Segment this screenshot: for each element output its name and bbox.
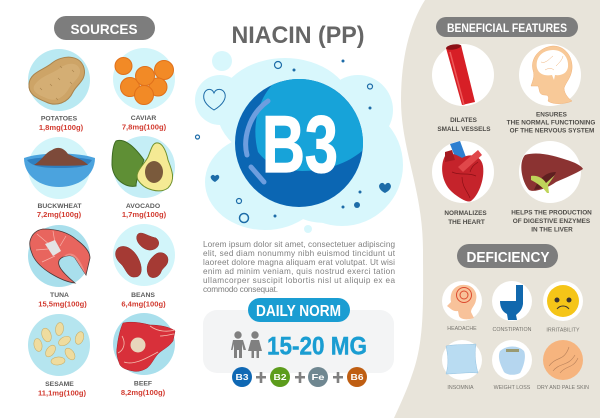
- feature: dilates small vessels: [432, 43, 494, 133]
- feature: heart: [432, 141, 494, 226]
- daily norm pill: DAILY NORM: [256, 303, 341, 320]
- feature: liver: OF DIGESTIVE ENZYMES: [513, 218, 591, 225]
- source: avocado: 1,7mg(100g): [122, 210, 167, 219]
- source: beans: 6,4mg(100g): [121, 300, 166, 308]
- daily norm panel: [203, 298, 394, 387]
- source: beef: BEEF: [134, 380, 152, 388]
- source: tuna: TUNA: [50, 292, 69, 299]
- feature: dilates small vessels: DILATES: [450, 117, 478, 124]
- feature: nervous system: OF THE NERVOUS SYSTEM: [510, 128, 594, 134]
- feature: dilates small vessels: SMALL VESSELS: [437, 126, 491, 133]
- title: NIACIN (PP): [232, 22, 364, 49]
- symptom: insomnia: INSOMNIA: [447, 385, 474, 391]
- feature: liver: HELPS THE PRODUCTION: [511, 210, 592, 216]
- source: beans: BEANS: [131, 292, 155, 299]
- source: tuna: [28, 225, 90, 308]
- feature: nervous system: [507, 44, 595, 134]
- source: avocado: AVOCADO: [126, 203, 160, 210]
- source: tuna: 15,5mg(100g): [38, 300, 87, 308]
- source: sesame: [28, 314, 90, 398]
- sources heading: [54, 16, 155, 40]
- symptom: insomnia: [442, 340, 482, 391]
- deficiency heading: [457, 244, 558, 268]
- source: buckwheat: [24, 137, 95, 219]
- feature: heart: THE HEART: [448, 219, 485, 226]
- source: beans: [113, 224, 175, 308]
- symptom: constipation: [492, 281, 532, 333]
- lorem ipsum text block: enim ad minim veniam, quis nostrud exerci tation: [203, 267, 395, 276]
- beneficial features heading: [436, 17, 578, 37]
- symptom: constipation: CONSTIPATION: [493, 327, 532, 333]
- lorem ipsum text block: commodo consequat.: [203, 285, 278, 294]
- vitamin chips: B2: [274, 372, 287, 382]
- vitamin B3 illustration: B3: [262, 100, 338, 190]
- vitamin chips: B3: [236, 372, 249, 382]
- source: potatoes: 1,8mg(100g): [39, 123, 84, 132]
- feature: nervous system: THE NORMAL FUNCTIONING: [507, 120, 595, 126]
- feature: nervous system: ENSURES: [536, 112, 568, 118]
- source: beef: 8,2mg(100g): [121, 388, 166, 397]
- lorem ipsum text block: laoreet dolore magna aliquam erat volutpat. Ut wisi: [203, 258, 395, 267]
- symptom: dry and pale skin: [537, 340, 589, 391]
- lorem ipsum text block: Lorem ipsum dolor sit amet, consectetuer adipiscing: [203, 240, 395, 249]
- source: avocado: [112, 136, 175, 219]
- feature: liver: IN THE LIVER: [531, 226, 573, 234]
- source: beef: [113, 313, 175, 397]
- source: buckwheat: BUCKWHEAT: [37, 203, 82, 210]
- sources heading: SOURCES: [70, 21, 138, 37]
- vitamin chips: [232, 367, 367, 387]
- feature: liver: [511, 141, 592, 234]
- beige side panel: [394, 0, 600, 418]
- vitamin chips: B6: [350, 372, 364, 382]
- deficiency heading: DEFICIENCY: [466, 250, 550, 266]
- source: caviar: 7,8mg(100g): [122, 122, 167, 132]
- lorem ipsum text block: [203, 240, 396, 294]
- symptom: headache: HEADACHE: [447, 326, 477, 332]
- symptom: weight loss: WEIGHT LOSS: [494, 385, 531, 391]
- vitamin chips: Fe: [312, 372, 325, 382]
- symptom: irritability: [543, 281, 583, 334]
- source: buckwheat: 7,2mg(100g): [37, 210, 82, 219]
- lorem ipsum text block: ullamcorper suscipit lobortis nisl ut aliquip ex ea: [203, 276, 395, 285]
- icon: heart outline: [204, 89, 225, 110]
- symptom: dry and pale skin: DRY AND PALE SKIN: [537, 385, 589, 391]
- beneficial features heading: BENEFICIAL FEATURES: [447, 23, 567, 35]
- source: sesame: SESAME: [45, 381, 74, 388]
- icon: people: [231, 331, 262, 358]
- symptom: weight loss: [492, 340, 532, 391]
- source: caviar: [113, 48, 175, 132]
- symptom: headache: [442, 281, 482, 332]
- symptom: irritability: IRRITABILITY: [546, 328, 580, 334]
- dose value: 15-20 MG: [267, 332, 367, 360]
- source: potatoes: POTATOES: [41, 116, 78, 122]
- source: potatoes: [28, 49, 90, 132]
- lorem ipsum text block: elit, sed diam nonummy nibh euismod tincidunt ut: [203, 249, 396, 258]
- daily norm pill: [248, 298, 350, 322]
- source: sesame: 11,1mg(100g): [38, 388, 87, 398]
- vitamin B3 illustration: [195, 51, 403, 233]
- feature: heart: NORMALIZES: [444, 210, 487, 217]
- source: caviar: CAVIAR: [131, 115, 156, 122]
